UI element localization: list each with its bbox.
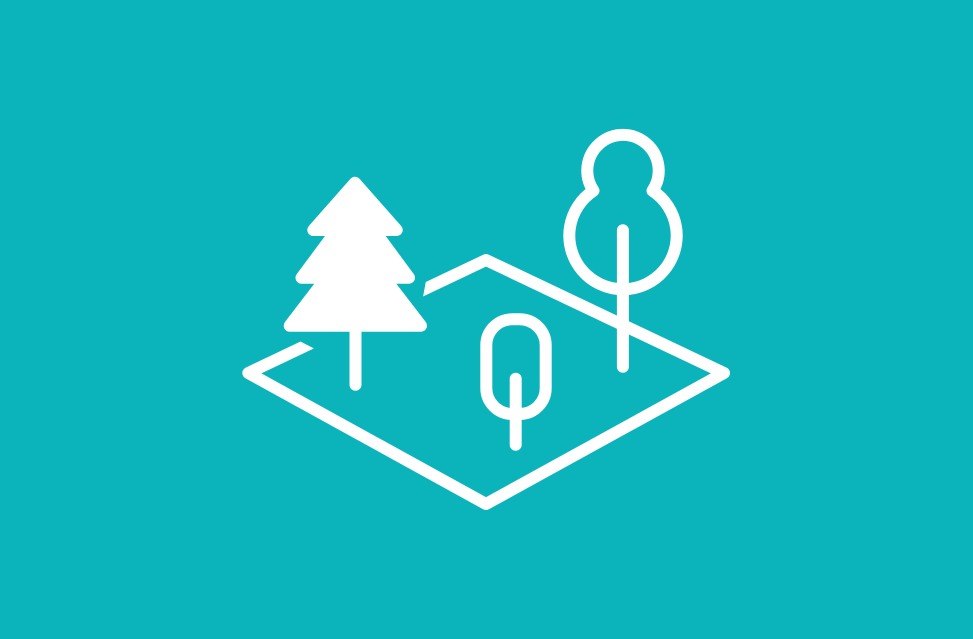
icon: diamond ground outline xyxy=(248,260,724,504)
icon: small oval tree xyxy=(486,319,546,445)
icon: pine tree xyxy=(290,183,421,385)
icon: park landscape illustration xyxy=(242,128,730,510)
icon: round tree xyxy=(569,135,677,367)
